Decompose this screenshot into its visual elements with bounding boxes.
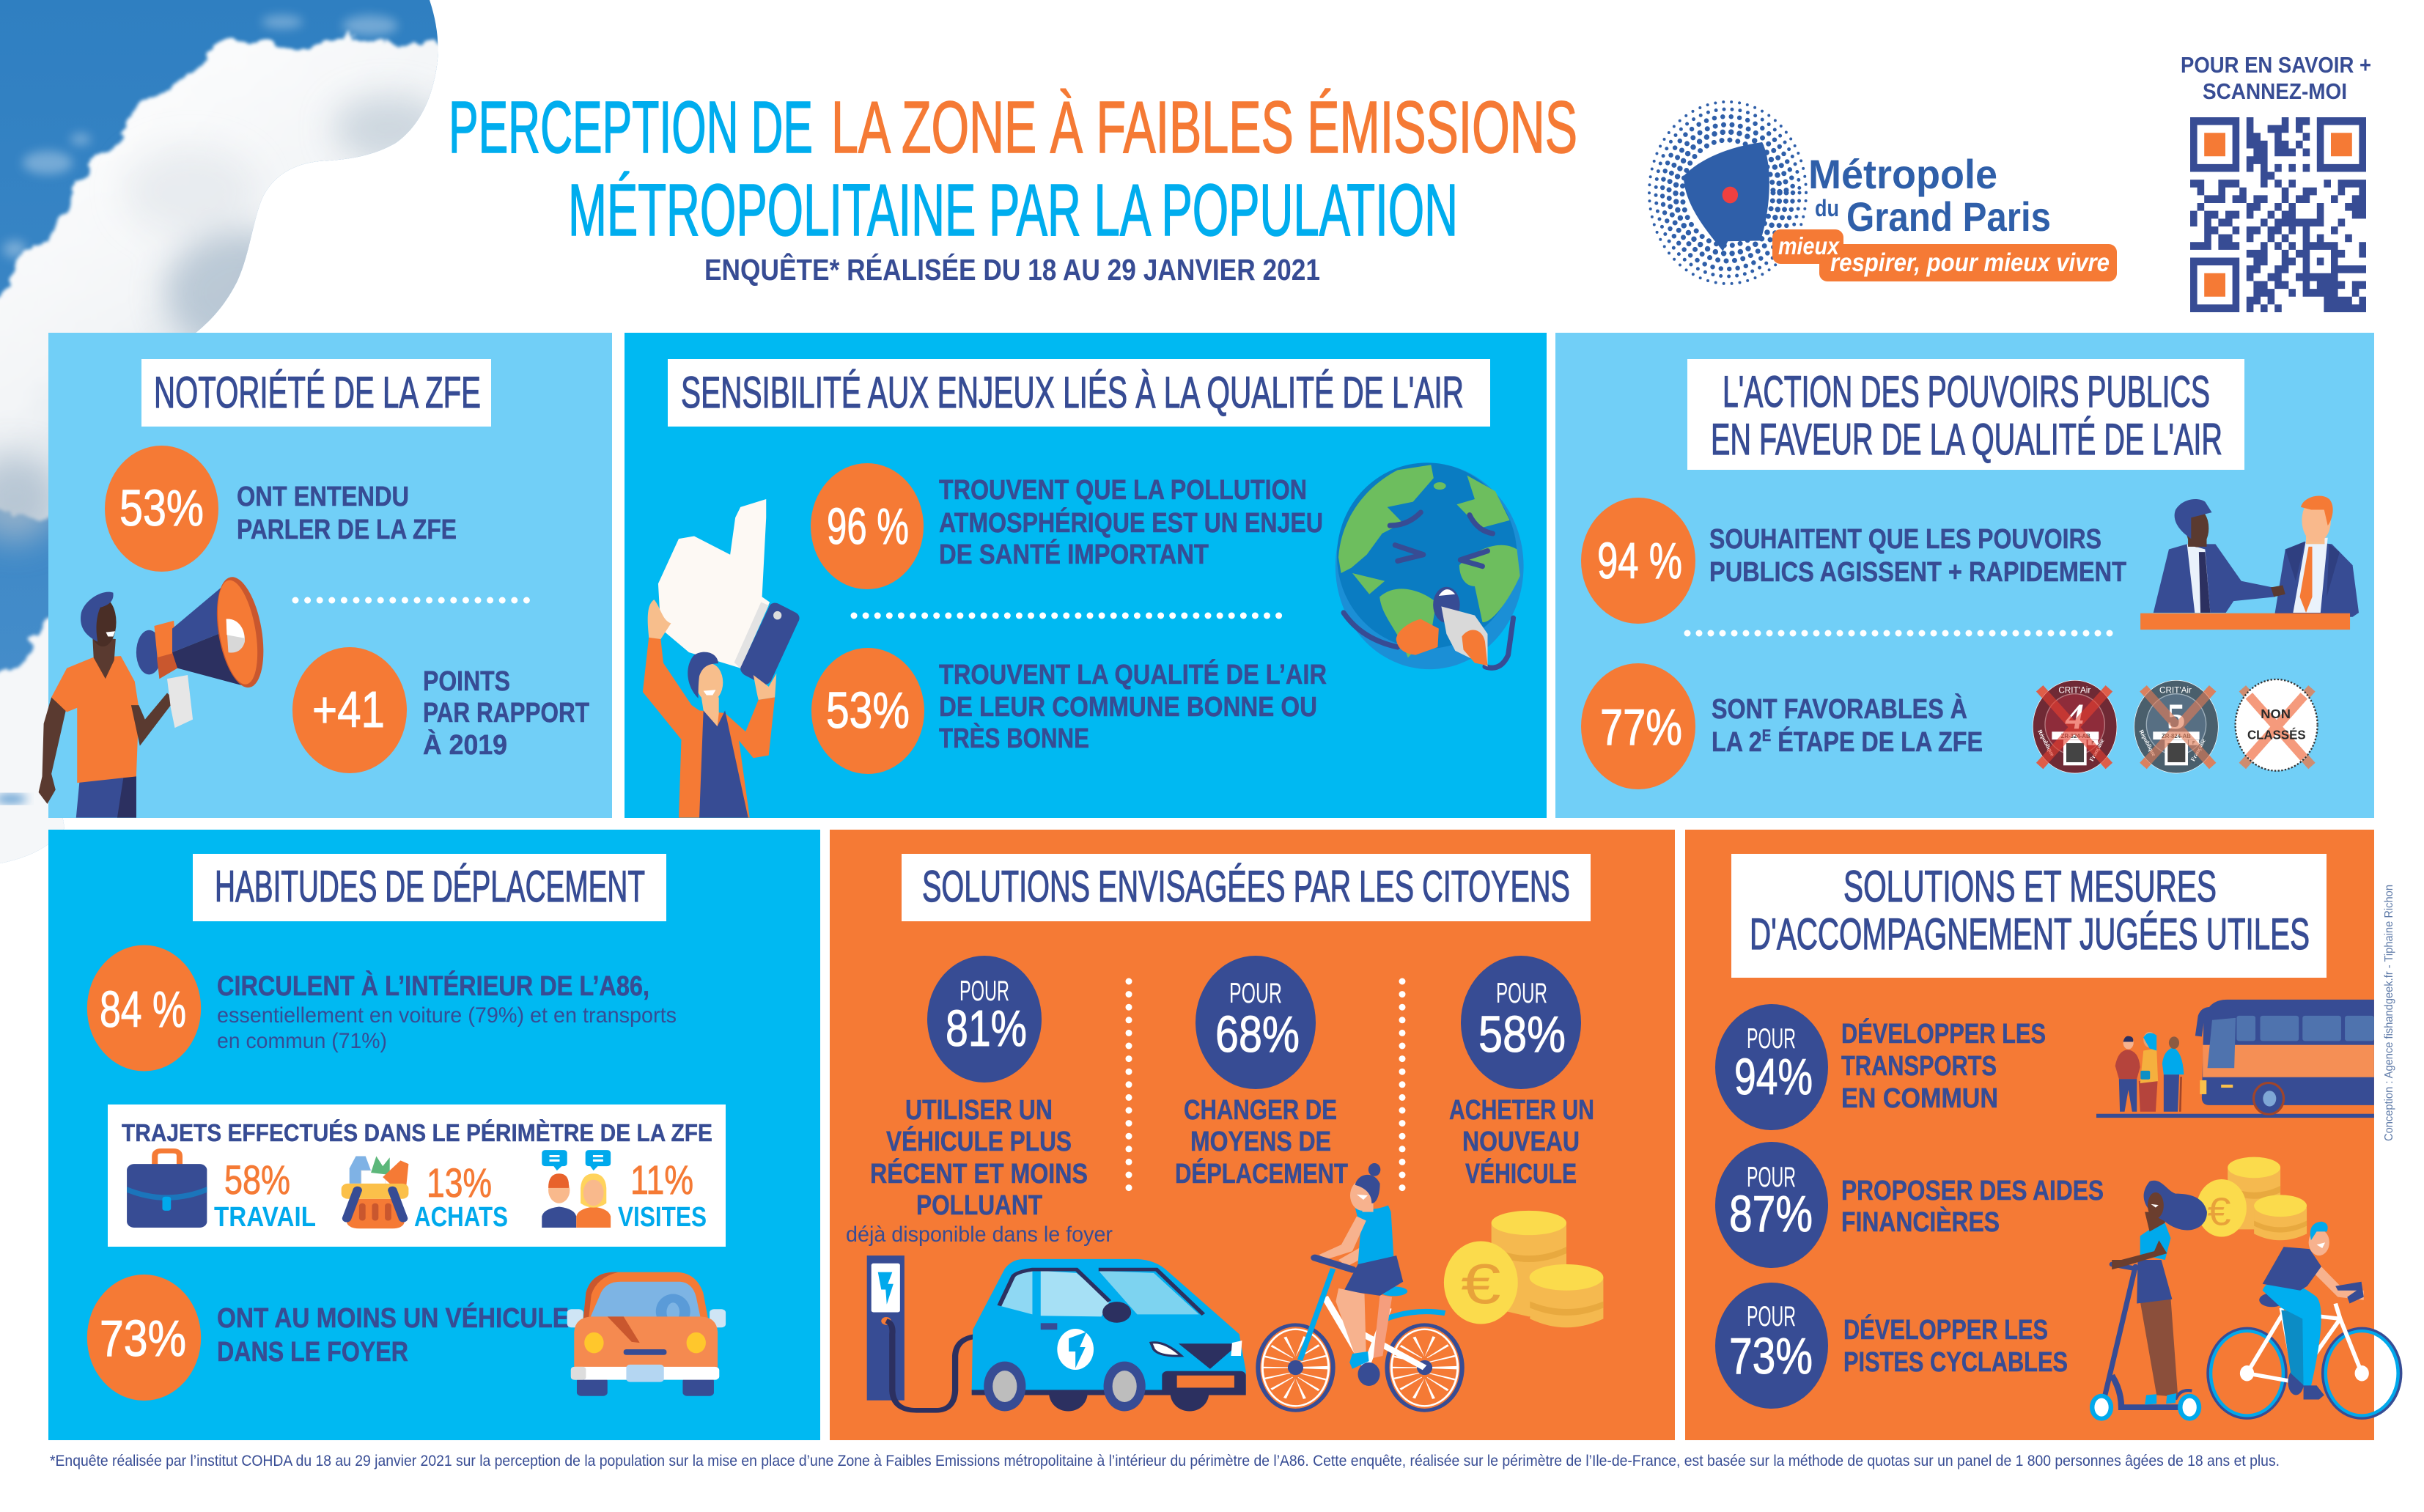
text: acheter un nouveau véhicule: [1449, 1095, 1594, 1190]
text: aides financières: PROPOSER DES AIDES: [1841, 1176, 2104, 1206]
text: qualité de l'air bonne: TRÈS BONNE: [939, 722, 1089, 754]
stat oval: pour 68%: 68%: [1215, 1006, 1300, 1063]
stat oval: pour 73%: [1715, 1283, 1828, 1409]
sticker: crit'air 5: CRIT'Air: [2159, 685, 2192, 695]
text: favorables à la 2e étape: ÉTAPE DE LA ZFE: [1771, 726, 1983, 758]
heading: [1687, 359, 2244, 470]
stat oval: 94%: [1581, 498, 1695, 624]
stat: 11% visites: [618, 1157, 707, 1233]
panel: action des pouvoirs publics: [1555, 333, 2374, 818]
sticker: non classés: [2236, 679, 2318, 771]
heading: SOLUTIONS ENVISAGÉES PAR LES CITOYENS: [922, 862, 1570, 911]
stat oval: pour 58%: POUR: [1496, 978, 1547, 1009]
sticker: crit'air 4: 4: [2065, 696, 2084, 737]
illustration: two men shaking hands: [2140, 495, 2359, 630]
text: acheter un nouveau véhicule: NOUVEAU: [1462, 1126, 1580, 1157]
sticker: crit'air 4: CRIT'Air: [2058, 685, 2090, 695]
text: véhicule plus récent: UTILISER UN: [905, 1095, 1053, 1126]
stat oval: 53%: [811, 648, 924, 774]
text: ont entendu parler de la ZFE: [237, 482, 457, 545]
icon: briefcase: [127, 1151, 207, 1228]
stat oval: 73%: [87, 1275, 201, 1401]
stat oval: 77%: 77%: [1600, 698, 1682, 756]
heading: NOTORIÉTÉ DE LA ZFE: [154, 368, 481, 417]
text: pistes cyclables: [1843, 1313, 2068, 1378]
panel background: [48, 333, 612, 818]
text: pollution enjeu de santé: DE SANTÉ IMPORTANT: [939, 538, 1209, 570]
stat oval: 94%: 94 %: [1597, 532, 1682, 589]
stat: 13% achats: 13%: [427, 1159, 492, 1206]
title: LA ZONE À FAIBLES ÉMISSIONS: [831, 86, 1577, 169]
text: circulent à l'intérieur de l'A86: essentiellement en voiture (79%) et en transports: [217, 1003, 677, 1028]
sticker: crit'air 5: Française: [2189, 737, 2207, 762]
stat oval: 53%: 53%: [119, 479, 204, 536]
text: transports en commun: DÉVELOPPER LES: [1841, 1017, 2046, 1050]
text: au moins un véhicule: [217, 1302, 569, 1368]
heading: SOLUTIONS ET MESURES: [1843, 862, 2217, 911]
sticker: crit'air 4: République: [2036, 729, 2056, 758]
stat oval: pour 87%: [1715, 1142, 1828, 1268]
text: ont entendu parler de la ZFE: PARLER DE LA ZFE: [237, 515, 457, 545]
stat oval: pour 68%: [1196, 956, 1316, 1089]
text: changer de moyens: [1175, 1095, 1348, 1190]
person: woman in yellow: [2139, 1032, 2158, 1112]
text: changer de moyens: DÉPLACEMENT: [1175, 1157, 1348, 1190]
text: ont entendu parler de la ZFE: ONT ENTENDU: [237, 482, 409, 512]
illustration: woman on a bicycle: [1258, 1163, 1462, 1410]
sticker: crit'air 4: [2033, 680, 2117, 773]
panel background: [1685, 830, 2374, 1440]
stat oval: 53%: 53%: [826, 682, 910, 739]
person: man in red sweater: [2115, 1036, 2140, 1112]
box: trajets effectués: [108, 1105, 726, 1247]
stat oval: pour 73%: POUR: [1747, 1301, 1796, 1332]
sticker: non classés: NON: [2261, 707, 2291, 721]
stat oval: pour 81%: POUR: [959, 976, 1009, 1007]
credit: Conception : Agence fishandgeek.fr - Tiphaine Richon: [2383, 885, 2395, 1141]
title: PERCEPTION DE: [449, 86, 813, 169]
text: pouvoirs publics agissent: SOUHAITENT QUE LES POUVOIRS: [1709, 524, 2101, 555]
logo: Métropole du Grand Paris: [1649, 102, 2117, 284]
text: points par rapport à 2019: PAR RAPPORT: [423, 698, 589, 729]
QR code label: POUR EN SAVOIR +: [2181, 52, 2371, 78]
panel: sensibilité aux enjeux: [625, 333, 1547, 818]
heading: [193, 854, 666, 921]
logo: Métropole du Grand Paris: mieux: [1778, 232, 1840, 259]
text: au moins un véhicule: DANS LE FOYER: [217, 1337, 408, 1368]
text: points par rapport à 2019: À 2019: [423, 729, 507, 761]
QR code label: [2181, 52, 2371, 104]
panel: solutions envisagées par les citoyens: [830, 830, 1675, 1440]
text: circulent à l'intérieur de l'A86: en commun (71%): [217, 1029, 387, 1053]
stat: 11% visites: 11%: [630, 1157, 693, 1203]
sticker: crit'air 5: F: [2192, 741, 2195, 745]
stat oval: pour 58%: [1461, 956, 1581, 1089]
text: pistes cyclables: DÉVELOPPER LES: [1843, 1313, 2048, 1346]
box: trajets effectués: TRAJETS EFFECTUÉS DANS LE PÉRIMÈTRE DE LA ZFE: [122, 1119, 712, 1146]
stat oval: 73%: 73%: [100, 1310, 186, 1367]
text: pollution enjeu de santé: [939, 475, 1323, 570]
sticker: crit'air 5: ZR-824-AB: [2162, 733, 2191, 740]
icon: orange car: [567, 1272, 726, 1396]
stat oval: pour 68%: POUR: [1229, 978, 1282, 1009]
illustration: person holding a giant thumbs up: [643, 499, 800, 818]
sticker: non classés: CLASSÉS: [2247, 726, 2306, 742]
stat oval: 77%: [1581, 663, 1695, 789]
illustration: earth with inhaler: [1336, 462, 1524, 669]
text: véhicule plus récent: déjà disponible dans le foyer: [846, 1222, 1113, 1247]
panel background: [830, 830, 1675, 1440]
logo: Métropole du Grand Paris: Grand Paris: [1846, 193, 2051, 240]
text: changer de moyens: MOYENS DE: [1190, 1126, 1331, 1157]
text: circulent à l'intérieur de l'A86: [217, 970, 677, 1053]
logo: Métropole du Grand Paris: Métropole: [1808, 151, 1997, 197]
text: favorables à la 2e étape: [1712, 693, 1983, 758]
text: pouvoirs publics agissent: [1709, 524, 2126, 588]
stat: 11% visites: VISITES: [618, 1202, 707, 1233]
stat oval: pour 81%: [927, 956, 1042, 1083]
text: favorables à la 2e étape: LA 2: [1712, 727, 1771, 758]
panel background: [48, 830, 820, 1440]
text: qualité de l'air bonne: [939, 658, 1327, 754]
text: pollution enjeu de santé: ATMOSPHÉRIQUE EST UN ENJEU: [939, 506, 1323, 539]
heading: [902, 854, 1591, 921]
stat oval: pour 73%: 73%: [1729, 1327, 1813, 1384]
text: au moins un véhicule: ONT AU MOINS UN VÉHICULE: [217, 1302, 569, 1334]
stat oval: 84%: [87, 945, 201, 1072]
text: favorables à la 2e étape: E: [1762, 726, 1771, 745]
panel background: [625, 333, 1547, 818]
illustration: electric car and charger: [867, 1255, 1246, 1412]
panel background: [1555, 333, 2374, 818]
text: aides financières: [1841, 1176, 2104, 1238]
icon: euro coins: €: [1461, 1252, 1501, 1316]
text: pouvoirs publics agissent: PUBLICS AGISSENT + RAPIDEMENT: [1709, 557, 2126, 588]
title: MÉTROPOLITAINE PAR LA POPULATION: [568, 169, 1458, 251]
text: changer de moyens: CHANGER DE: [1184, 1095, 1337, 1126]
stickers: crit'air 4, crit'air 5, non classés, crossed out: [2033, 679, 2318, 773]
illustration: man on a bicycle: [2208, 1222, 2401, 1418]
stat oval: 84%: 84 %: [100, 981, 186, 1038]
sticker: crit'air 4: F: [2091, 741, 2094, 745]
stat: 58% travail: TRAVAIL: [214, 1202, 316, 1233]
text: acheter un nouveau véhicule: VÉHICULE: [1465, 1157, 1577, 1190]
footnote: *Enquête réalisée par l’institut COHDA du 18 au 29 janvier 2021 sur la perception de la population sur la mise en place d’une Zone à Faibles Emissions métropolitaine à l’intérieur du périmètre de l’A86. Cette enquête, réalisée sur le périmètre de l’Ile-de-France, est basée sur la méthode de quotas sur un panel de 1 800 personnes âgées de 18 ans et plus.: [50, 1453, 2280, 1469]
person: old man with cane: [2162, 1036, 2184, 1112]
sticker: crit'air 5: 5: [2167, 696, 2185, 737]
panel: notoriété de la ZFE: [39, 333, 612, 818]
stat: 58% travail: [214, 1157, 316, 1233]
text: qualité de l'air bonne: DE LEUR COMMUNE BONNE OU: [939, 692, 1317, 723]
heading: HABITUDES DE DÉPLACEMENT: [215, 862, 645, 911]
sticker: crit'air 5: [2134, 680, 2218, 773]
stat: 13% achats: ACHATS: [414, 1202, 508, 1233]
stat oval: pour 58%: 58%: [1478, 1006, 1566, 1063]
icon: two people talking: [542, 1150, 611, 1228]
stat: 13% achats: [414, 1159, 508, 1233]
wispy clouds: [3, 15, 398, 258]
stat: 58% travail: 58%: [224, 1157, 290, 1203]
stat oval: pour 81%: 81%: [946, 1000, 1027, 1057]
heading: [668, 359, 1490, 427]
heading: [1731, 854, 2327, 978]
text: pistes cyclables: PISTES CYCLABLES: [1843, 1347, 2068, 1378]
stat oval: +41: [292, 647, 407, 773]
illustration: bus and passengers: [2096, 1000, 2374, 1118]
sticker: crit'air 4: ZR-324-AB: [2061, 733, 2090, 740]
text: véhicule plus récent: VÉHICULE PLUS: [886, 1125, 1072, 1157]
sky and cloud background: [0, 0, 469, 879]
text: favorables à la 2e étape: SONT FAVORABLES À: [1712, 693, 1967, 725]
icon: euro coins: €: [2208, 1190, 2231, 1233]
illustration: woman on a scooter: [2092, 1181, 2207, 1419]
text: transports en commun: [1841, 1017, 2046, 1114]
text: aides financières: FINANCIÈRES: [1841, 1206, 2000, 1238]
icon: euro coins: [1444, 1211, 1603, 1327]
text: transports en commun: TRANSPORTS: [1841, 1051, 1997, 1082]
stat oval: pour 94%: [1715, 1004, 1828, 1130]
text: points par rapport à 2019: [423, 666, 589, 761]
text: véhicule plus récent: RÉCENT ET MOINS: [870, 1157, 1088, 1190]
logo: Métropole du Grand Paris: du: [1815, 195, 1839, 221]
stat oval: pour 87%: POUR: [1747, 1162, 1796, 1193]
subtitle: ENQUÊTE* RÉALISÉE DU 18 AU 29 JANVIER 2021: [704, 253, 1320, 287]
stat oval: 96%: [811, 463, 924, 589]
text: acheter un nouveau véhicule: ACHETER UN: [1449, 1095, 1594, 1126]
text: véhicule plus récent: POLLUANT: [916, 1190, 1042, 1221]
heading: SENSIBILITÉ AUX ENJEUX LIÉS À LA QUALITÉ DE L'AIR: [681, 368, 1464, 417]
stat oval: pour 94%: POUR: [1747, 1023, 1796, 1055]
stat oval: pour 87%: 87%: [1729, 1185, 1813, 1242]
text: circulent à l'intérieur de l'A86: CIRCULENT À L’INTÉRIEUR DE L’A86,: [217, 970, 649, 1002]
QR code label: SCANNEZ-MOI: [2203, 78, 2347, 104]
stat oval: +41: +41: [312, 681, 385, 738]
stat oval: 96%: 96 %: [827, 498, 909, 555]
cloud shading: [0, 95, 443, 542]
sticker: crit'air 5: République: [2138, 729, 2157, 758]
logo: Métropole du Grand Paris: respirer, pour mieux vivre: [1830, 248, 2110, 277]
text: pollution enjeu de santé: TROUVENT QUE LA POLLUTION: [939, 475, 1307, 506]
text: qualité de l'air bonne: TROUVENT LA QUALITÉ DE L’AIR: [939, 658, 1327, 690]
heading: [141, 359, 491, 427]
text: véhicule plus récent: [846, 1095, 1113, 1247]
icon: euro coins: [2197, 1157, 2307, 1240]
icon: man with megaphone: [39, 573, 271, 818]
title: [449, 86, 1577, 251]
QR code: [2190, 117, 2366, 312]
text: points par rapport à 2019: POINTS: [423, 666, 510, 697]
stat oval: pour 94%: 94%: [1734, 1048, 1813, 1105]
panel: habitudes de déplacement: [48, 830, 820, 1440]
sticker: crit'air 4: Française: [2088, 737, 2106, 762]
panel: solutions et mesures d'accompagnement: [1685, 830, 2401, 1440]
stat oval: 53%: [105, 446, 218, 572]
text: transports en commun: EN COMMUN: [1841, 1083, 1998, 1114]
icon: shopping basket: [342, 1156, 408, 1228]
